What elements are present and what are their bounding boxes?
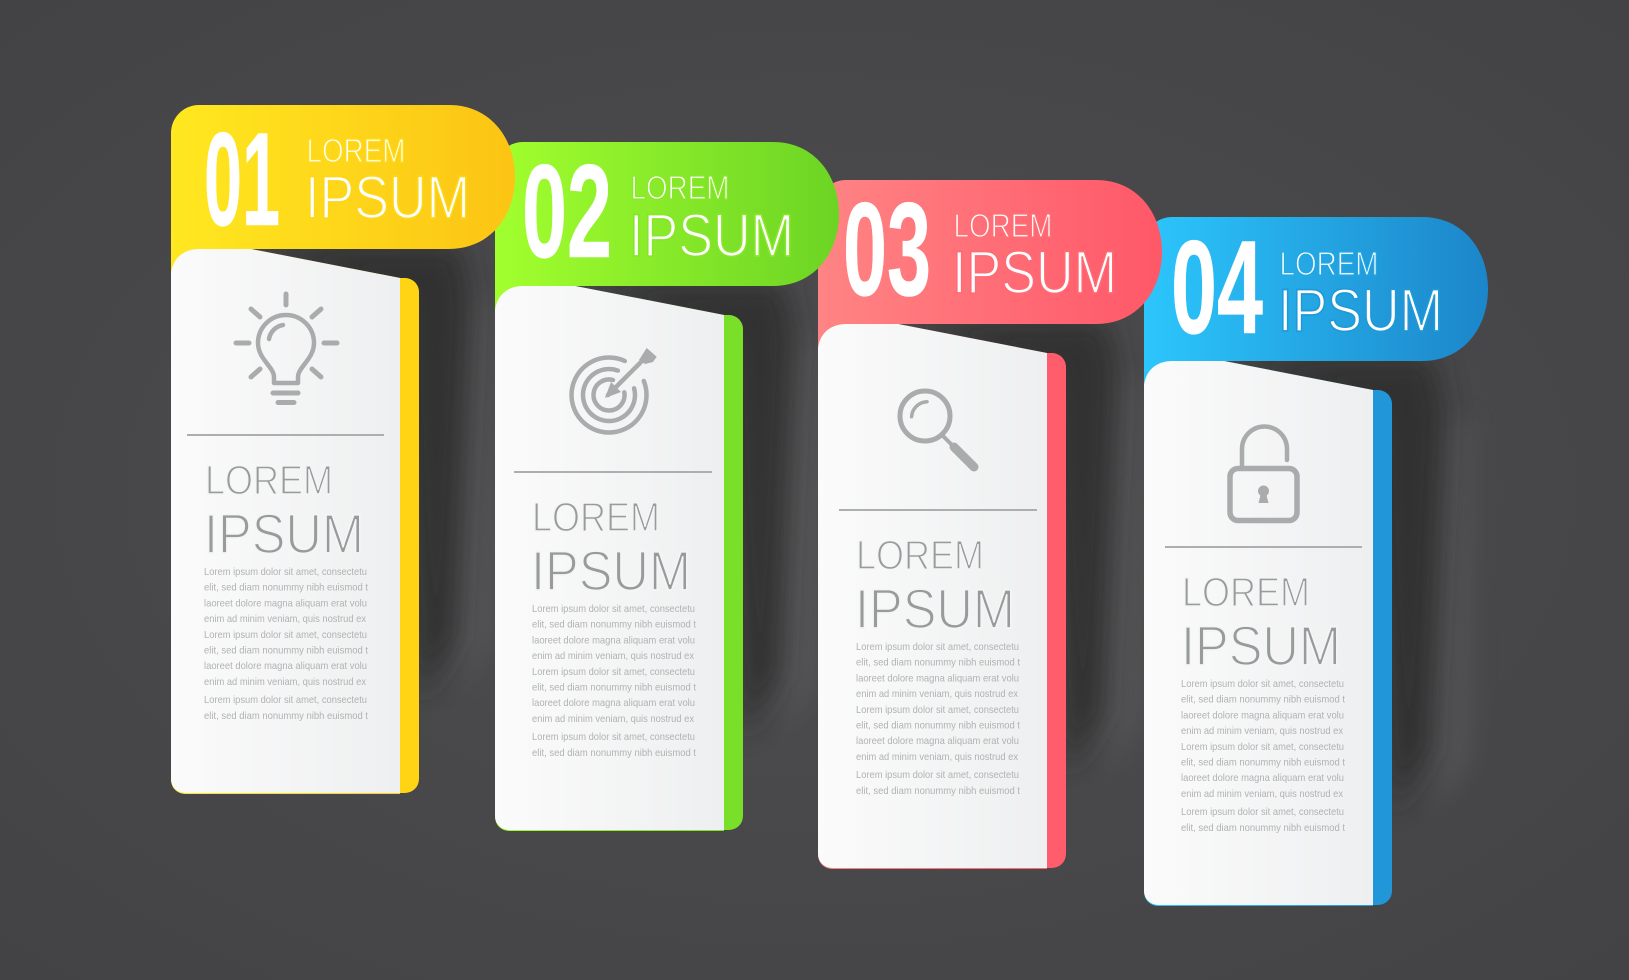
body text 03: [856, 642, 1020, 797]
body text 04: [1181, 679, 1345, 834]
body text 02: laoreet dolore magna aliquam erat volu: [532, 698, 695, 709]
body text 02: Lorem ipsum dolor sit amet, consectetu: [532, 604, 695, 615]
color edge strip 04: [1373, 390, 1392, 905]
heading 01: [204, 457, 364, 565]
tab title ipsum 04: IPSUM: [1278, 277, 1443, 344]
divider 02: [514, 471, 712, 473]
heading 02: [531, 494, 691, 602]
body text 01: [204, 567, 368, 722]
body text 02: Lorem ipsum dolor sit amet, consectetu: [532, 667, 695, 678]
body text 02: enim ad minim veniam, quis nostrud ex: [532, 651, 695, 662]
body text 03: laoreet dolore magna aliquam erat volu: [856, 736, 1019, 747]
heading 04: [1181, 569, 1341, 677]
number 04: 04: [1171, 214, 1263, 362]
tab title lorem 01: LOREM: [306, 132, 406, 169]
heading 04: IPSUM: [1181, 614, 1341, 677]
icon: light bulb: [236, 294, 337, 402]
body text 03: laoreet dolore magna aliquam erat volu: [856, 673, 1019, 684]
tab 03: [818, 176, 1162, 869]
tab title ipsum 03: IPSUM: [952, 239, 1117, 306]
tab title lorem 04: LOREM: [1280, 245, 1378, 282]
body text 01: enim ad minim veniam, quis nostrud ex: [204, 614, 367, 625]
body text 01: elit, sed diam nonummy nibh euismod t: [204, 583, 368, 594]
body text 01: laoreet dolore magna aliquam erat volu: [204, 661, 367, 672]
body text 02: elit, sed diam nonummy nibh euismod t: [532, 620, 696, 631]
tab 01: [171, 105, 515, 794]
body text 03: Lorem ipsum dolor sit amet, consectetu: [856, 770, 1019, 781]
body text 03: elit, sed diam nonummy nibh euismod t: [856, 658, 1020, 669]
body text 02: laoreet dolore magna aliquam erat volu: [532, 635, 695, 646]
icon: padlock: [1230, 426, 1297, 520]
light streaks beside cards: [455, 300, 1468, 810]
body text 03: elit, sed diam nonummy nibh euismod t: [856, 786, 1020, 797]
body text 01: enim ad minim veniam, quis nostrud ex: [204, 677, 367, 688]
body text 04: Lorem ipsum dolor sit amet, consectetu: [1181, 679, 1344, 690]
panel 01: yellow card: [171, 105, 515, 794]
body text 01: elit, sed diam nonummy nibh euismod t: [204, 711, 368, 722]
heading 04: LOREM: [1182, 569, 1310, 615]
white sheet 03: [818, 324, 1047, 868]
body text 04: enim ad minim veniam, quis nostrud ex: [1181, 789, 1344, 800]
panel 04: blue card: [1144, 214, 1488, 906]
body text 04: elit, sed diam nonummy nibh euismod t: [1181, 695, 1345, 706]
number 01: 01: [204, 106, 280, 254]
panel 02: green card: [495, 138, 839, 831]
heading 03: LOREM: [856, 532, 984, 578]
heading 03: IPSUM: [855, 577, 1015, 640]
body text 01: Lorem ipsum dolor sit amet, consectetu: [204, 695, 367, 706]
body text 02: enim ad minim veniam, quis nostrud ex: [532, 714, 695, 725]
heading 02: LOREM: [532, 494, 660, 540]
body text 04: Lorem ipsum dolor sit amet, consectetu: [1181, 807, 1344, 818]
color edge strip 01: [400, 278, 419, 793]
icon: target and dart: [572, 348, 657, 433]
body text 03: enim ad minim veniam, quis nostrud ex: [856, 752, 1019, 763]
heading 01: IPSUM: [204, 502, 364, 565]
divider 04: [1165, 546, 1362, 548]
tab title ipsum 01: IPSUM: [305, 164, 470, 231]
body text 01: Lorem ipsum dolor sit amet, consectetu: [204, 630, 367, 641]
body text 03: enim ad minim veniam, quis nostrud ex: [856, 689, 1019, 700]
divider 03: [839, 509, 1037, 511]
body text 02: Lorem ipsum dolor sit amet, consectetu: [532, 732, 695, 743]
color edge strip 03: [1047, 353, 1066, 868]
body text 02: elit, sed diam nonummy nibh euismod t: [532, 682, 696, 694]
body text 02: [532, 604, 696, 759]
white sheet 01: [171, 249, 400, 793]
tab title ipsum 02: IPSUM: [629, 202, 794, 269]
heading 01: LOREM: [205, 457, 333, 503]
card shadows: [251, 245, 1444, 812]
body text 01: elit, sed diam nonummy nibh euismod t: [204, 646, 368, 656]
divider 01: [187, 434, 384, 436]
heading 02: IPSUM: [531, 539, 691, 602]
number 02: 02: [522, 138, 612, 286]
body text 04: elit, sed diam nonummy nibh euismod t: [1181, 823, 1345, 834]
body text 01: Lorem ipsum dolor sit amet, consectetu: [204, 567, 367, 578]
tab 04: [1144, 214, 1488, 906]
tab title lorem 02: LOREM: [630, 169, 730, 206]
color edge strip 02: [724, 315, 743, 830]
body text 01: laoreet dolore magna aliquam erat volu: [204, 598, 367, 609]
white sheet 04: [1144, 361, 1373, 905]
tab 02: [495, 138, 839, 831]
number 03: 03: [843, 176, 931, 324]
icon: magnifier: [900, 391, 974, 467]
heading 03: [855, 532, 1015, 640]
body text 04: elit, sed diam nonummy nibh euismod t: [1181, 758, 1345, 768]
body text 03: elit, sed diam nonummy nibh euismod t: [856, 720, 1020, 732]
white sheet 02: [495, 286, 724, 830]
body text 04: Lorem ipsum dolor sit amet, consectetu: [1181, 742, 1344, 753]
body text 02: elit, sed diam nonummy nibh euismod t: [532, 748, 696, 759]
body text 04: enim ad minim veniam, quis nostrud ex: [1181, 726, 1344, 737]
body text 04: laoreet dolore magna aliquam erat volu: [1181, 710, 1344, 721]
body text 03: Lorem ipsum dolor sit amet, consectetu: [856, 642, 1019, 653]
body text 04: laoreet dolore magna aliquam erat volu: [1181, 773, 1344, 784]
tab title lorem 03: LOREM: [954, 207, 1052, 244]
panel 03: red card: [818, 176, 1162, 869]
body text 03: Lorem ipsum dolor sit amet, consectetu: [856, 705, 1019, 716]
